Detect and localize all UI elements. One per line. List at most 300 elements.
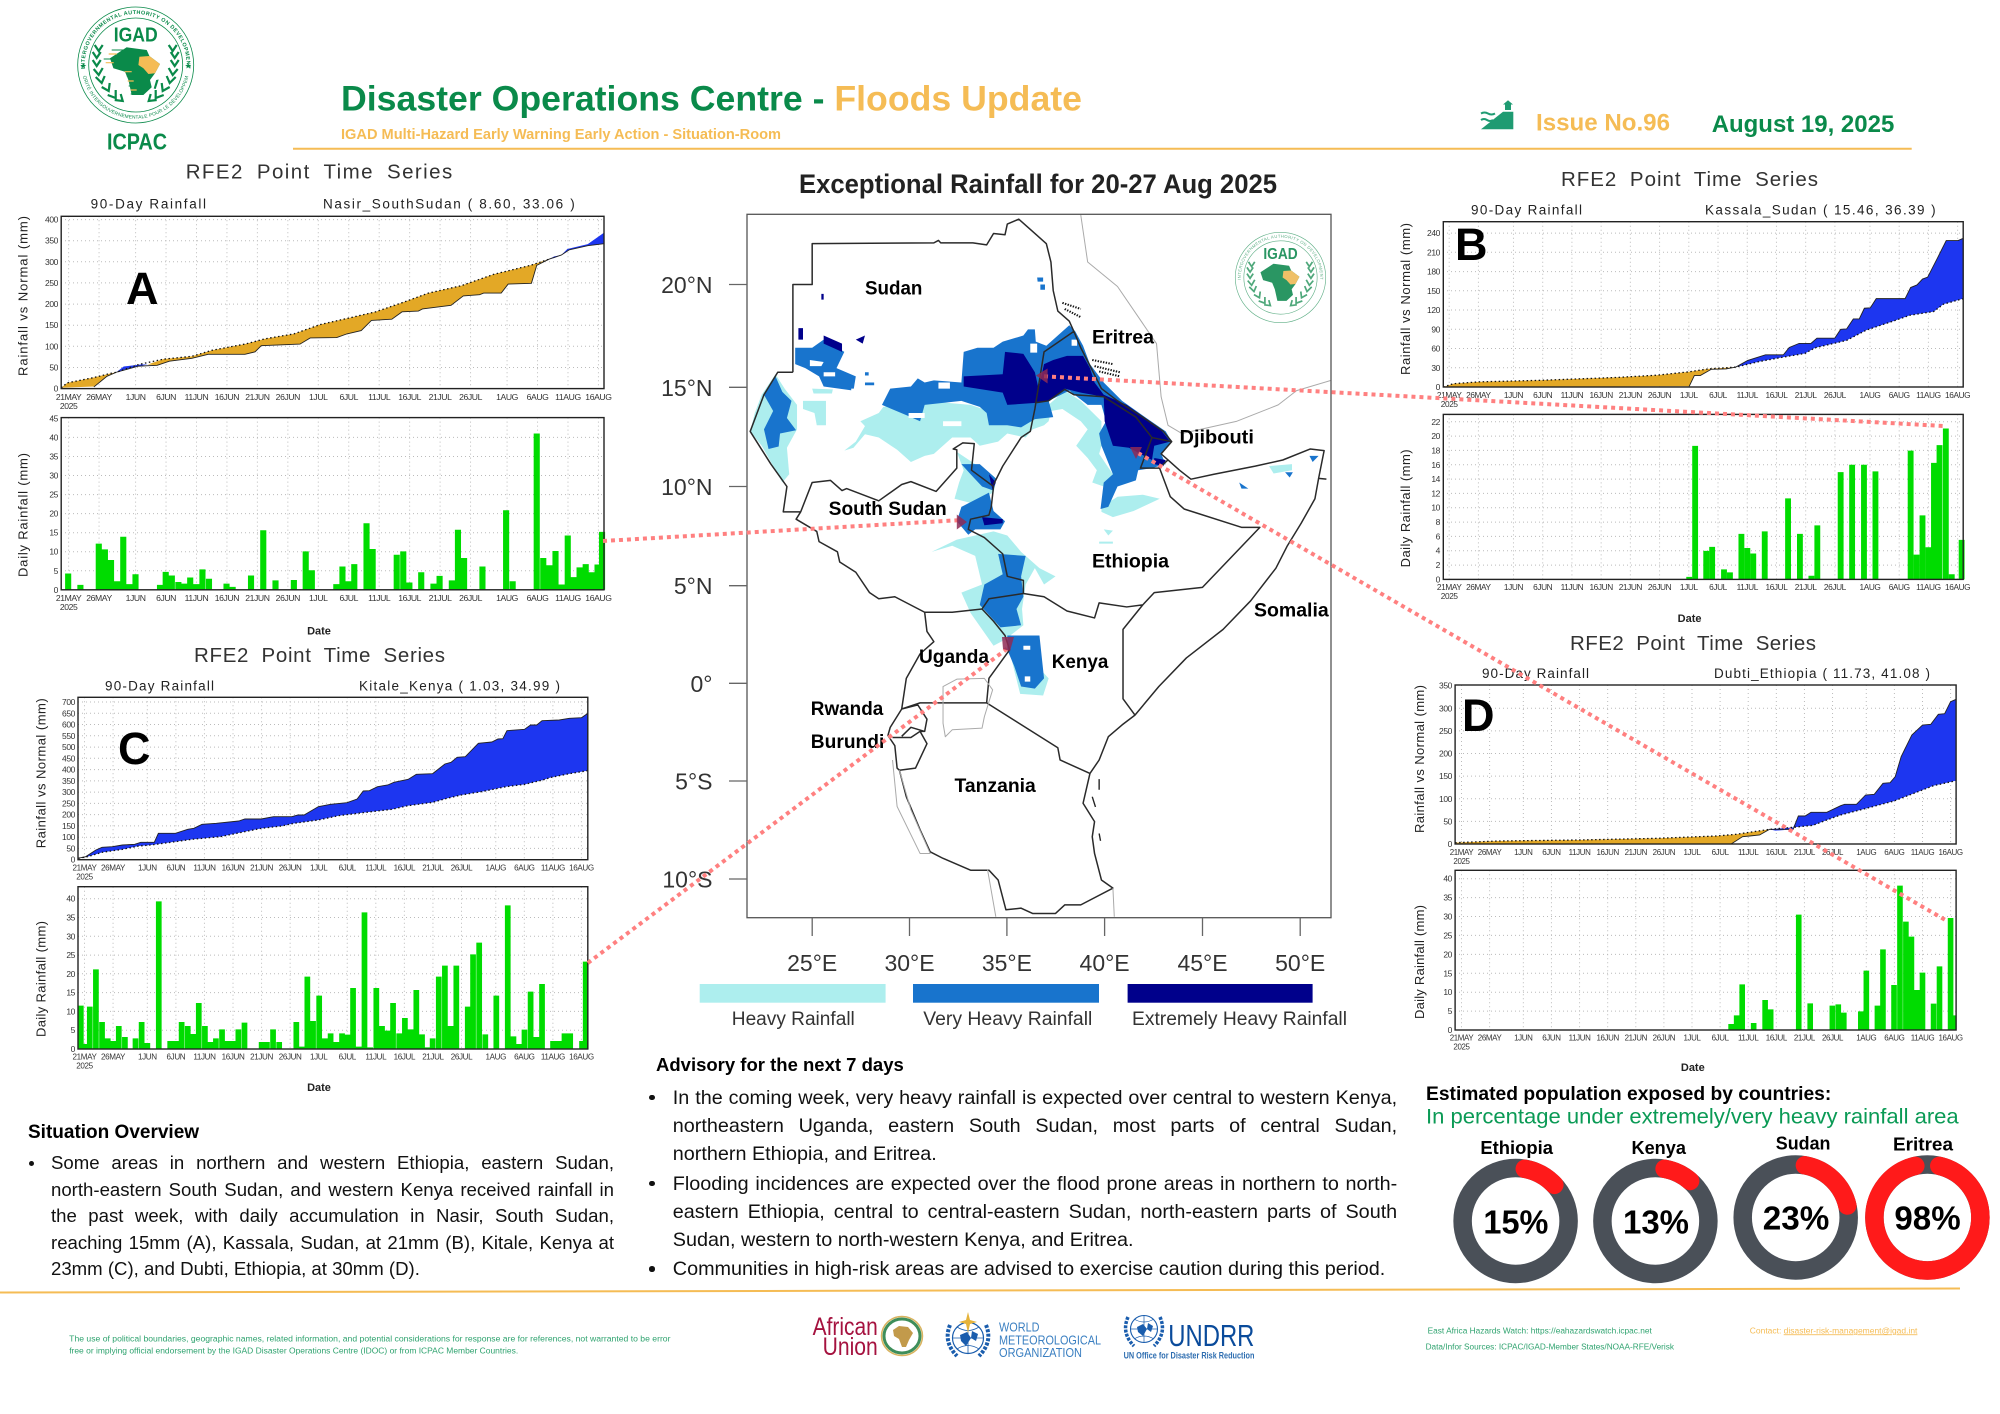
country labels: Rwanda [811,699,884,720]
y axis labels: 20 [66,969,76,979]
x axis labels: 21JUL [1795,582,1817,592]
panel: chart A Nasir South Sudan [16,160,612,638]
rainfall holes [810,340,1077,682]
y axis labels: 14 [1431,474,1441,484]
latitude labels: 5°N [674,573,712,599]
x axis labels: 21JUL [429,593,452,603]
x axis labels: 26JUL [459,392,483,402]
x axis labels: 16JUL [1765,582,1788,592]
y axis labels: 550 [62,731,76,741]
x axis labels: 26MAY [1466,582,1491,592]
x axis labels: 6AUG [1884,1033,1904,1043]
x axis labels: 16JUN [222,862,245,873]
y axis labels: 25 [66,950,76,960]
Zanzibar and Pemba islands [1092,779,1101,841]
x axis labels: 11AUG [541,862,565,873]
x axis labels: 16JUL [398,593,422,603]
latitude labels: 10°N [661,474,712,500]
x axis labels: 21JUL [422,862,444,873]
x axis labels: 6JUL [1709,582,1728,592]
chart: cumulative rainfall vs normal [61,233,604,388]
x axis labels [1437,390,1970,409]
x axis labels: 6JUN [1542,848,1561,857]
chart: daily rainfall bars [1689,428,1962,579]
y axis labels: 35 [1443,893,1453,903]
x axis labels: 11AUG [1916,582,1941,592]
y axis labels: 16 [1431,460,1441,470]
advisory text: Flooding incidences are expected over the flood prone areas in northern to north- [673,1173,1397,1195]
x axis labels: 11JUN [185,593,209,603]
y axis labels: 12 [1431,488,1441,498]
x axis labels: 21MAY [73,1051,97,1062]
chart title: RFE2 Point Time Series [1570,632,1816,655]
y axis labels: 150 [62,821,76,831]
latitude labels: 20°N [661,272,712,298]
footer disclaimer [69,1334,671,1355]
donut: Ethiopia: Ethiopia [1480,1137,1554,1158]
x axis labels: 1AUG [1856,1033,1876,1043]
station label: Dubti_Ethiopia ( 11.73, 41.08 ) [1714,666,1930,681]
x axis labels: 1JUL [310,862,328,873]
x axis labels: 1JUL [310,1051,328,1062]
country labels: Ethiopia [1092,551,1169,572]
y axis labels: 0 [1448,839,1453,849]
panel: rainfall map [661,169,1347,1030]
chart: cumulative rainfall vs normal [1455,699,1956,844]
arrows: dotted callout lines to station charts [588,376,1945,963]
y axis labels: 25 [1443,930,1453,940]
y axis labels: 240 [1427,228,1441,238]
x axis labels: 21JUN [1619,390,1642,400]
advisory text [673,1087,1397,1280]
y axis labels: 150 [45,320,59,330]
y axis labels: 700 [62,697,76,707]
x axis labels: 16JUN [1589,390,1613,400]
chart: daily rainfall bars [68,433,602,590]
y axis labels: 4 [1436,546,1441,556]
x axis labels: 6JUN [156,392,176,402]
logo text: ICPAC: ICPAC [107,128,167,154]
x axis labels: 21JUN [1619,582,1642,592]
x axis labels [1437,582,1970,601]
date: August 19, 2025 [1712,111,1894,138]
advisory text: In the coming week, very heavy rainfall is expected over central to western Kenya, [673,1087,1397,1109]
situation text: Some areas in northern and western Ethiopia, eastern Sudan, [51,1152,614,1173]
x axis labels: 6AUG [514,862,535,873]
longitude labels: 40°E [1080,950,1130,976]
chart title: RFE2 Point Time Series [1561,168,1818,191]
y axis labels: 15 [49,528,59,538]
x axis labels: 26MAY [86,392,113,402]
station label: Kassala_Sudan ( 15.46, 36.39 ) [1705,202,1936,218]
x axis labels: 11JUN [1569,848,1591,857]
x axis labels: 26JUN [276,392,300,402]
y axis labels: 300 [62,787,76,797]
y axis title: Daily Rainfall (mm) [34,921,48,1037]
x axis labels: 6JUN [1533,390,1553,400]
y axis labels: 45 [49,413,59,423]
map title: Exceptional Rainfall for 20-27 Aug 2025 [799,169,1277,199]
donut: Sudan: Sudan [1776,1132,1830,1153]
logo: IGAD ICPAC emblem: ★ [80,62,87,70]
station label: Kitale_Kenya ( 1.03, 34.99 ) [359,678,560,694]
legend: heavy rainfall: Heavy Rainfall [732,1009,855,1030]
x axis labels: 16AUG [1945,582,1970,592]
x axis labels: 1JUN [1504,390,1523,400]
y axis labels: 150 [1439,771,1453,781]
advisory heading: Advisory for the next 7 days [656,1054,904,1075]
x axis labels: 6JUN [1542,1033,1561,1043]
latitude labels [661,272,712,892]
x axis labels: 21JUN [1625,848,1647,857]
x axis labels [73,862,594,882]
y axis labels: 350 [62,776,76,786]
x axis labels: 6JUL [1712,848,1729,857]
y axis labels: 0 [1448,1025,1453,1035]
advisory text: Communities in high-risk areas are advised to exercise caution during this period. [673,1258,1385,1280]
x axis labels: 2025 [1441,399,1458,409]
x axis labels: 11JUL [1738,848,1759,857]
advisory text: northeastern Uganda, eastern South Sudan, most parts of central Sudan, [673,1115,1397,1137]
situation text: reaching 15mm (A), Kassala, Sudan, at 21mm (B), Kitale, Kenya at [51,1232,614,1253]
x axis labels: 1JUN [126,392,146,402]
situation text [51,1152,614,1279]
legend: heavy rainfall [700,984,886,1030]
x axis labels [1450,848,1963,866]
x axis labels: 16JUN [215,392,239,402]
longitude labels: 50°E [1275,950,1325,976]
y axis labels: 35 [66,912,76,922]
y axis labels: 50 [66,843,76,853]
footer sources [1426,1325,1675,1351]
x axis labels: 21JUN [1625,1033,1647,1043]
y axis labels: 6 [1436,531,1441,541]
rainfall: heavy [750,374,1292,696]
x axis labels: 1JUN [1514,1033,1533,1043]
footer contact: Contact: disaster-risk-management@igad.int [1750,1325,1918,1335]
subtitle: IGAD Multi-Hazard Early Warning Early Action - Situation-Room [341,126,781,143]
logo: World Meteorological Organization: METEOROLOGICAL [999,1333,1101,1347]
y axis title: Rainfall vs Normal (mm) [1412,685,1427,833]
axis ticks [729,284,1300,936]
footer sources: Data/Infor Sources: ICPAC/IGAD-Member States/NOAA-RFE/Verisk [1426,1341,1675,1351]
x axis labels: 26MAY [101,1051,126,1062]
x axis labels: 11JUL [365,1051,387,1062]
x axis labels: 11JUL [1738,1033,1759,1043]
chart title: RFE2 Point Time Series [186,160,452,184]
legend: very heavy rainfall [913,984,1099,1030]
x axis labels: 1JUL [309,593,328,603]
x axis title: Date [1681,1062,1705,1074]
x axis labels: 26JUN [1648,390,1672,400]
y axis title: Rainfall vs Normal (mm) [16,216,30,376]
x axis labels: 1JUL [309,392,328,402]
x axis labels: 11JUN [1561,582,1584,592]
footer disclaimer: The use of political boundaries, geographic names, related information, and potential considerations for response are for references, not warranted to be error [69,1334,671,1344]
panel: chart C Kitale Kenya [34,644,594,1094]
legend: very heavy rainfall: Very Heavy Rainfall [923,1009,1092,1030]
islands [1062,303,1120,376]
x axis labels: 21JUN [250,862,273,873]
x axis labels: 16JUL [398,392,422,402]
x axis labels: 2025 [1453,1042,1470,1052]
x axis labels: 11JUN [193,862,216,873]
y axis labels: 15 [1443,968,1453,978]
x axis labels: 21MAY [56,392,82,402]
y axis title: Rainfall vs Normal (mm) [1398,223,1413,375]
x axis labels: 26MAY [86,593,113,603]
y axis title: Daily Rainfall (mm) [1398,449,1413,567]
x axis labels: 16AUG [569,1051,594,1062]
country labels [811,279,1329,797]
x axis labels: 6JUL [339,1051,357,1062]
icon: flood house on hill [1481,100,1513,129]
logo: IGAD ICPAC emblem: ★ [185,62,192,70]
y axis labels: 40 [1443,874,1453,884]
x axis labels: 6JUN [156,593,176,603]
x axis labels: 21JUN [250,1051,273,1062]
y axis labels: 0 [54,384,59,394]
x axis labels: 16JUN [1596,1033,1619,1043]
x axis labels: 16AUG [585,593,612,603]
y axis labels: 40 [66,894,76,904]
x axis labels: 1JUN [1504,582,1523,592]
y axis labels: 15 [66,988,76,998]
logo: IGAD ICPAC emblem: IGAD [114,24,158,46]
x axis labels: 16JUL [394,862,416,873]
chart: daily rainfall bars [81,901,586,1049]
situation text: 23mm (C), and Dubti, Ethiopia, at 30mm (D). [51,1258,420,1279]
advisory text: Sudan, western to north-western Kenya, and Eritrea. [673,1229,1134,1251]
y axis title: Daily Rainfall (mm) [1412,905,1427,1019]
x axis labels: 16JUN [215,593,239,603]
logo: World Meteorological Organization: ORGANIZATION [999,1346,1082,1360]
x axis labels: 11AUG [1911,848,1934,857]
x axis labels: 21MAY [1437,582,1462,592]
x axis labels: 1JUN [138,862,157,873]
map drawing [750,215,1331,917]
x axis labels: 6JUN [167,1051,186,1062]
longitude labels [787,950,1325,976]
x axis labels: 1JUN [126,593,146,603]
y axis labels: 50 [1443,816,1453,826]
x axis labels [73,1051,594,1071]
x axis labels: 6JUL [340,593,359,603]
x axis labels: 16JUL [394,1051,416,1062]
x axis labels: 2025 [76,871,93,882]
x axis labels: 16AUG [585,392,612,402]
x axis labels: 6AUG [1884,848,1904,857]
x axis labels: 11JUN [193,1051,216,1062]
footer disclaimer: free or implying official endorsement by the IGAD Disaster Operations Centre (IDOC) or from ICPAC Member Countries. [69,1345,518,1355]
x axis labels: 6JUL [1709,390,1728,400]
x axis labels: 11AUG [1911,1033,1934,1043]
situation text: the past week, with daily accumulation in Nasir, South Sudan, [51,1205,614,1226]
donut: Sudan [1743,1132,1849,1270]
x axis labels: 16AUG [569,862,594,873]
y axis labels: 350 [45,236,59,246]
subheading: population percentage: In percentage under extremely/very heavy rainfall area [1426,1104,1959,1128]
y axis labels: 30 [66,931,76,941]
donut: Sudan: 23% [1763,1199,1829,1236]
x axis labels: 11JUL [1737,582,1759,592]
title: Disaster Operations Centre - Floods Update [341,80,1082,119]
x axis labels: 26JUN [1653,848,1676,857]
x axis labels: 11AUG [1916,390,1941,400]
logo: African Union [813,1313,922,1361]
country labels: Somalia [1254,600,1329,621]
rainfall: very heavy [764,278,1319,689]
y axis labels: 450 [62,753,76,763]
y axis labels: 25 [49,490,59,500]
x axis labels: 21JUL [422,1051,444,1062]
chart caption: 90-Day Rainfall [1471,202,1582,218]
x axis labels: 11JUL [365,862,387,873]
panel letter: D [1462,690,1494,741]
y axis labels: 40 [49,432,59,442]
y axis labels: 10 [66,1006,76,1016]
x axis labels: 21MAY [1437,390,1462,400]
logo: IGAD ICPAC emblem: AUTORITÉ INTERGOUVERNEMENTALE POUR LE DÉVELOPPEMENT [83,76,188,119]
y axis labels: 0 [1436,574,1441,584]
x axis labels: 11AUG [555,593,582,603]
y axis labels: 200 [62,810,76,820]
donut: Eritrea: Eritrea [1893,1134,1954,1155]
country labels: Kenya [1052,652,1109,673]
x axis labels: 2025 [1453,857,1470,866]
chart caption: 90-Day Rainfall [91,196,206,212]
y axis labels: 30 [49,470,59,480]
y axis labels: 20 [1443,949,1453,959]
logo: IGAD inset: INTERGOVERNMENTAL AUTHORITY ON DEVELOPMENT [1238,234,1324,280]
x axis labels: 26JUL [451,1051,473,1062]
logo: IGAD ICPAC emblem: INTERGOVERNMENTAL AUTHORITY ON DEVELOPMENT [81,10,190,69]
x axis labels: 1JUN [138,1051,157,1062]
y axis labels: 5 [71,1025,76,1035]
chart caption: 90-Day Rainfall [1482,666,1589,681]
country labels: Burundi [811,732,884,753]
y axis labels: 5 [1448,1006,1453,1016]
logo: IGAD inset: IGAD [1263,246,1298,263]
x axis labels: 16AUG [1939,1033,1963,1043]
rainfall: extremely heavy [798,294,1170,525]
y axis labels: 35 [49,452,59,462]
x axis labels: 11JUL [368,392,391,402]
advisory text: eastern Ethiopia, central to central-eastern Sudan, north-eastern parts of South [673,1201,1397,1223]
x axis labels: 16AUG [1939,848,1963,857]
x axis labels: 26MAY [1478,1033,1502,1043]
legend: extremely heavy rainfall [1128,984,1347,1030]
x axis labels: 1JUL [1680,390,1698,400]
y axis labels: 8 [1436,517,1441,527]
footer sources: East Africa Hazards Watch: https://eahazardswatch.icpac.net [1428,1325,1652,1335]
x axis labels: 11JUL [1737,390,1759,400]
x axis labels: 6AUG [527,593,549,603]
country labels: South Sudan [829,499,947,520]
x axis labels: 26JUL [459,593,483,603]
y axis labels: 2 [1436,560,1441,570]
y axis labels: 250 [45,278,59,288]
x axis labels: 2025 [76,1060,93,1071]
x axis labels: 26JUN [276,593,300,603]
x axis labels [56,392,612,411]
x axis labels: 21MAY [1450,1033,1474,1043]
y axis labels: 100 [1439,794,1453,804]
y axis labels: 250 [62,798,76,808]
latitude labels: 10°S [662,866,712,892]
x axis labels: 26JUL [1824,582,1847,592]
y axis labels: 400 [45,215,59,225]
x axis labels: 26JUL [451,862,473,873]
x axis labels: 26JUN [1648,582,1672,592]
logo: UNDRR [1124,1316,1254,1360]
y axis labels: 300 [1439,703,1453,713]
panel letter: C [118,723,150,774]
y axis labels: 400 [62,765,76,775]
x axis labels: 11JUN [1569,1033,1591,1043]
x axis labels: 6AUG [514,1051,535,1062]
panel letter: B [1455,219,1488,270]
x axis labels: 1JUN [1514,848,1533,857]
x axis labels: 1AUG [1856,848,1876,857]
y axis labels: 10 [1431,503,1441,513]
x axis labels: 6AUG [527,392,549,402]
logo: IGAD inset [1234,232,1326,323]
x axis labels: 1AUG [486,1051,506,1062]
y axis labels: 18 [1431,445,1441,455]
station label: Nasir_SouthSudan ( 8.60, 33.06 ) [323,196,575,212]
y axis labels: 180 [1427,267,1441,277]
y axis labels: 0 [71,855,76,865]
country labels: Sudan [865,279,922,300]
x axis labels: 21JUL [1794,1033,1816,1043]
x axis labels: 2025 [60,401,78,411]
x axis labels: 11JUN [1561,390,1584,400]
y axis labels: 200 [1439,748,1453,758]
chart: daily rainfall bars [1731,886,1954,1030]
situation heading: Situation Overview [28,1122,199,1142]
panel: chart D Dubti Ethiopia [1412,632,1963,1074]
heading: population exposed: Estimated population exposed by countries: [1426,1083,1831,1105]
country labels: Uganda [919,647,989,668]
x axis labels: 21JUL [1794,848,1816,857]
x axis labels [56,593,612,612]
chart: cumulative rainfall vs normal [78,713,588,858]
station markers [957,368,1142,651]
x axis labels: 1JUL [1680,582,1698,592]
y axis labels: 300 [45,257,59,267]
latitude labels: 5°S [675,768,712,794]
donut: Kenya: 13% [1623,1203,1689,1240]
x axis labels: 16JUL [1765,390,1788,400]
y axis labels: 30 [1431,363,1441,373]
x axis labels: 6JUL [1712,1033,1729,1043]
y axis labels: 10 [1443,987,1453,997]
y axis labels: 20 [1431,431,1441,441]
x axis title: Date [307,626,331,638]
country labels: Eritrea [1092,328,1154,349]
y axis labels: 10 [49,547,59,557]
x axis title: Date [1678,613,1702,625]
longitude labels: 45°E [1177,950,1228,976]
chart: cumulative rainfall vs normal [1443,238,1963,387]
x axis labels: 1AUG [496,593,519,603]
x axis labels: 16AUG [1945,390,1970,400]
y axis labels: 100 [45,341,59,351]
logo: African Union: African [813,1313,878,1341]
x axis labels: 2025 [60,602,78,612]
x axis labels: 26JUN [279,862,302,873]
